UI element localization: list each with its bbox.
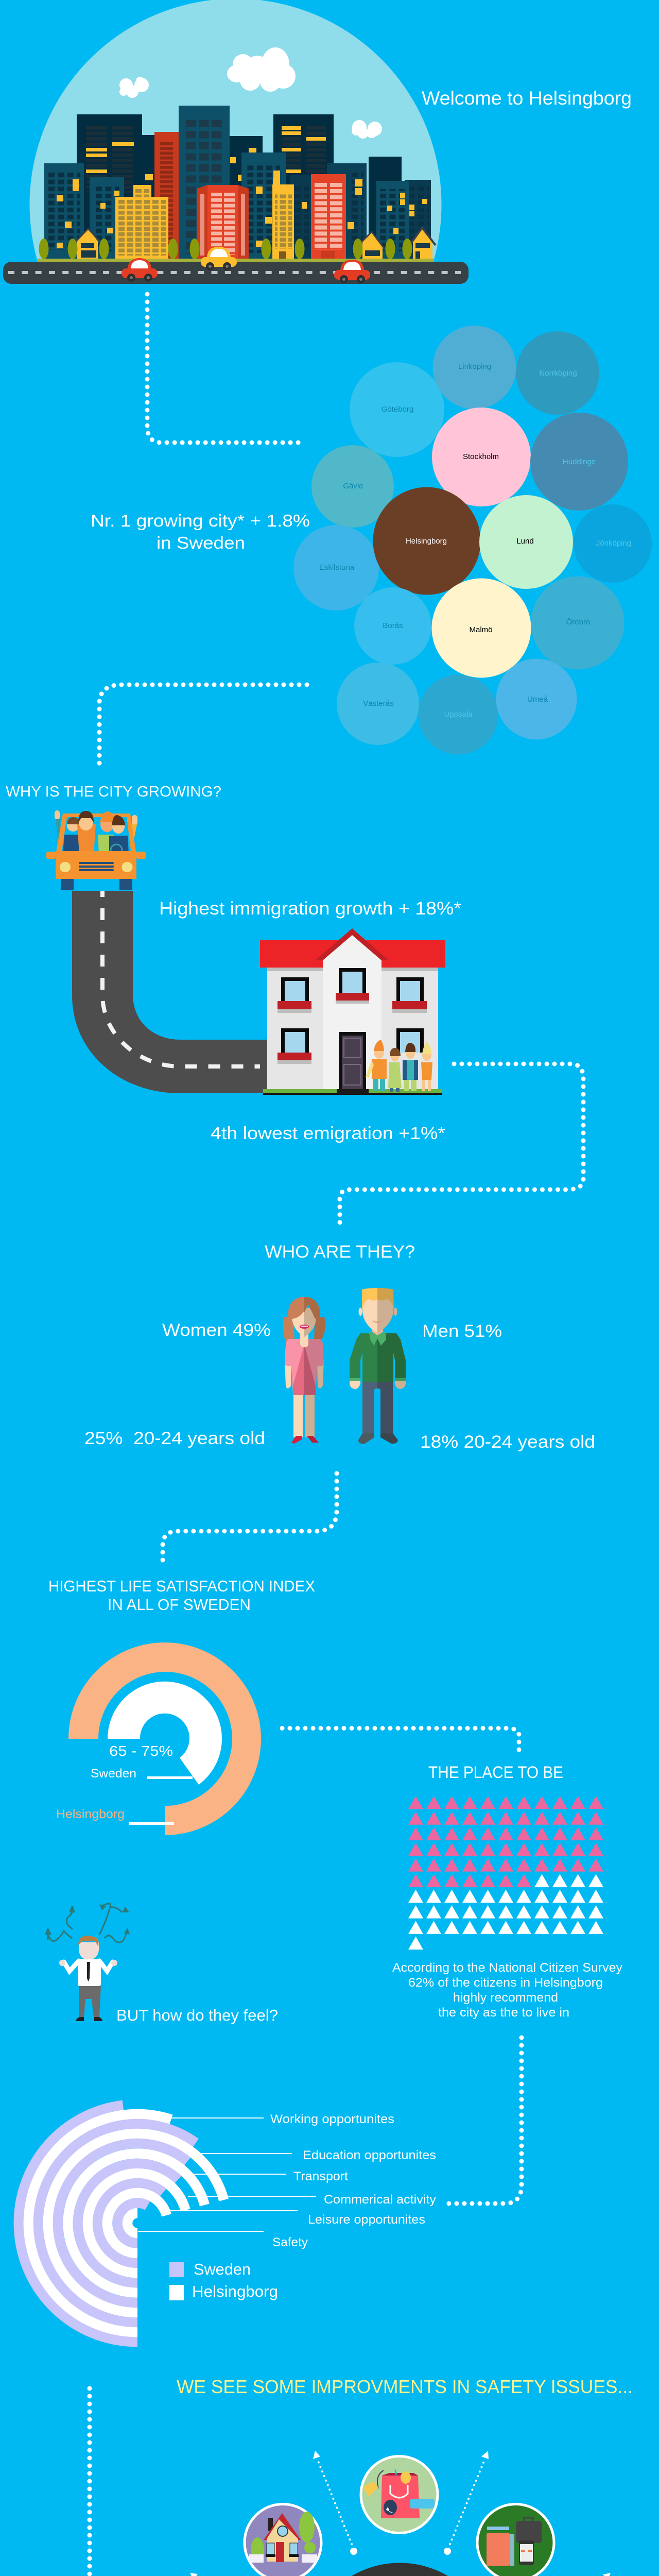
heading: highest life satisfaction: HIGHEST LIFE SATISFACTION INDEX [48,1577,315,1595]
red car left [122,258,158,282]
dotted connector 2 [99,685,307,766]
bubble: Malmö: Malmö [469,625,493,634]
leader lines and labels [138,2112,436,2249]
clouds in dome [119,47,382,139]
icon: car with family [46,810,146,890]
tie [87,1962,90,1981]
bubble: Huddinge: Huddinge [563,457,596,466]
mirrors [46,852,146,859]
text: national citizen survey: According to the National Citizen Survey [392,1961,622,1975]
legend [169,2260,278,2300]
dress [285,1339,304,1395]
icon: shopping circle [361,2456,438,2533]
confusion arrows [48,1904,127,1942]
label: Sweden [91,1767,193,1781]
dotted connector 4 [163,1473,337,1560]
text: national citizen survey: 62% of the citizens in Helsingborg [408,1976,603,1990]
value: 65 - 75% [109,1743,173,1759]
text: men age share: 18% 20-24 years old [420,1432,595,1452]
arrow: right [506,2573,611,2576]
chart: life satisfaction donut [56,1642,261,1835]
bubble: Huddinge [530,413,628,511]
cab frame [56,814,136,855]
face [362,1299,377,1333]
bubble: Borås: Borås [383,621,403,630]
arms [285,1360,291,1388]
bubble: Västerås [337,663,419,745]
bubble chart: growing cities [293,326,652,754]
text: women 49 percent: Women 49% [162,1320,271,1340]
chart: radial bars Sweden vs Helsingborg [19,2105,224,2342]
trees [39,239,412,259]
chart: triangle pictogram 62 of 100 [408,1796,607,1952]
neck [300,1332,308,1347]
illustration: city skyline in dome [3,0,469,284]
grill [79,862,114,871]
bubble: Umeå: Umeå [527,695,548,704]
dotted connector 3 [340,1064,583,1230]
mouth [300,1325,309,1329]
bubble: Lund: Lund [516,537,534,546]
head [79,1942,99,1960]
text: number one growing city: in Sweden [157,533,245,552]
hair [362,1288,377,1310]
bubble: Örebro [531,576,624,670]
legs [79,1986,101,2017]
bubble: Helsingborg: Helsingborg [406,537,447,546]
yellow car [201,247,237,270]
label: commerical activity: Commerical activity [324,2193,436,2207]
bubble: Västerås: Västerås [363,699,394,708]
bubble: Gävle: Gävle [343,482,363,490]
bubble: Stockholm [432,408,531,506]
label: Helsingborg: Helsingborg [56,1807,125,1821]
trousers [362,1382,377,1434]
car body [56,851,136,879]
label: leisure opportunites: Leisure opportunites [308,2213,425,2227]
label: education opportunites: Education opportunites [303,2148,436,2162]
red car right [334,260,370,283]
bubble: Norrköping: Norrköping [539,369,577,378]
text: national citizen survey: highly recommend [453,1991,558,2005]
small houses [76,228,436,259]
hands [350,1381,360,1389]
label: transport: Transport [293,2170,348,2183]
door [339,1032,366,1090]
label: working opportunites: Working opportunites [270,2112,394,2126]
lower windows [278,1028,424,1064]
icon: house circle [245,2504,321,2576]
road dashes [8,271,461,274]
text: highest immigration growth: Highest immigration growth + 18%* [159,899,461,919]
text: national citizen survey: the city as the to live in [438,2006,569,2020]
dotted connector 5 [282,1728,519,1751]
pigtails [283,1317,294,1346]
bubble: Uppsala [418,675,498,754]
bubble: Jönköping [574,504,652,583]
icon: house with family [260,928,445,1095]
glass rim [305,2563,495,2576]
heading: highest life satisfaction [48,1577,315,1614]
bubble: Jönköping: Jönköping [596,539,631,548]
title: welcome: Welcome to Helsingborg [422,88,632,109]
bubble: Göteborg: Göteborg [381,405,413,414]
dotted connector 1 [147,294,300,443]
roof [260,940,445,968]
heading: improvements in safety: WE SEE SOME IMPROVMENTS IN SAFETY ISSUES... [177,2376,633,2397]
raised arms [55,810,137,845]
bubble: Uppsala: Uppsala [444,710,473,719]
bubble: Gävle [311,445,394,528]
label: safety: Safety [272,2235,308,2249]
icon: confused man [45,1904,130,2021]
bubble: Eskilstuna [293,525,379,611]
bubble: Umeå [496,658,577,740]
shirt [350,1333,377,1382]
walls [267,968,438,1090]
arms [64,1961,113,1971]
heading: who are they: WHO ARE THEY? [265,1242,415,1262]
label: Sweden: Sweden [91,1767,136,1781]
shoes [358,1433,374,1444]
bubble: Stockholm: Stockholm [463,452,499,461]
legend: Helsingborg [192,2282,278,2300]
neck [372,1327,383,1335]
figure: woman [283,1297,325,1444]
family at house [366,1040,432,1092]
arc: Helsingborg [68,1642,261,1835]
bubble: Norrköping [516,331,599,415]
arrow: up left [313,2451,357,2555]
heading: the place to be: THE PLACE TO BE [428,1763,563,1782]
back buildings [44,106,431,260]
front buildings [115,174,346,260]
bubble: Lund [479,495,573,589]
dotted connector 6 [447,2038,522,2204]
hair [288,1297,320,1319]
icon: bag and books circle [477,2504,554,2576]
wheels [61,878,132,890]
text: men 51 percent: Men 51% [422,1321,502,1341]
road [3,262,469,284]
upper windows [278,968,427,1013]
ground strip [37,259,434,262]
heading: highest life satisfaction: IN ALL OF SWEDEN [108,1596,251,1614]
label: Helsingborg [56,1807,174,1825]
arrow: up right [444,2451,489,2555]
heading: why is the city growing: WHY IS THE CITY GROWING? [6,784,221,800]
shoes [291,1436,302,1444]
road to house [72,891,267,1093]
text: 4th lowest emigration: 4th lowest emigration +1%* [211,1124,445,1143]
bubble: Helsingborg [373,487,481,595]
text: number one growing city: Nr. 1 growing city* + 1.8% [91,511,310,530]
bubble: Linköping: Linköping [458,362,491,371]
shoes [76,2017,84,2021]
bubble: Linköping [432,326,516,409]
text: women age share: 25% 20-24 years old [84,1429,265,1448]
sky dome [29,0,442,260]
arrow: left [190,2573,295,2576]
legs [293,1395,303,1437]
text: number one growing city [91,511,310,552]
bubble: Borås [354,587,431,665]
dotted connector 7 [90,2388,183,2576]
grass [263,1089,442,1093]
face [292,1308,304,1337]
figure: man [350,1288,406,1444]
text: national citizen survey [392,1961,622,2020]
bubble: Eskilstuna: Eskilstuna [319,563,355,572]
text: but how do they feel: BUT how do they feel? [116,2006,278,2024]
magnifying glass with police officer [305,2563,495,2576]
arc: Sweden [108,1682,222,1785]
bubble: Örebro: Örebro [566,617,590,626]
bubble: Göteborg [350,362,444,457]
torso [78,1959,101,1986]
headlights [60,862,133,872]
family in car [63,811,129,856]
bubble: Malmö [431,578,531,678]
legend: Sweden [194,2260,251,2278]
gable [315,928,389,960]
